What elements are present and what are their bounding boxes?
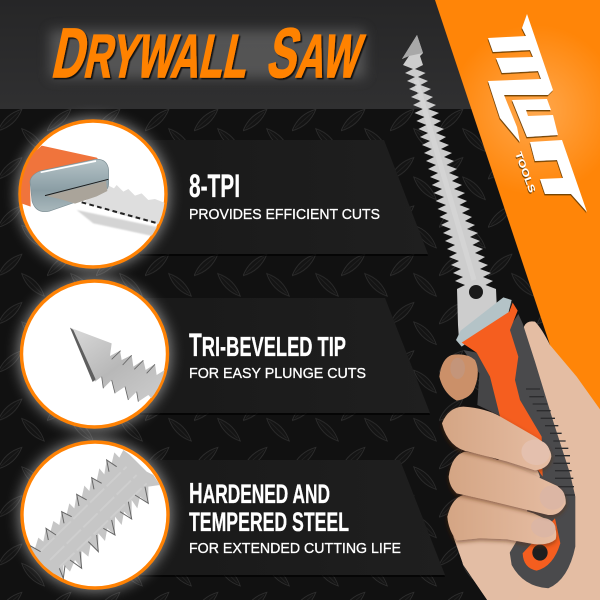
heading: hardened and tempered steel: HARDENED AND bbox=[189, 478, 330, 510]
blade tip shading bbox=[402, 35, 423, 59]
logo mark bbox=[488, 14, 587, 212]
thumb tip bbox=[439, 354, 478, 401]
hand holding saw handle bbox=[439, 297, 600, 600]
panel: 8-TPI bbox=[140, 140, 428, 256]
finger 3 bbox=[447, 495, 557, 544]
heading: 8-TPI: 8-TPI bbox=[189, 168, 240, 204]
serrated blade bbox=[20, 450, 160, 578]
palm over handle base bbox=[455, 536, 523, 600]
circle: hardened steel close-up bbox=[19, 439, 171, 591]
brushed steel streaks bbox=[40, 467, 147, 567]
logo text: tools: TOOLS bbox=[512, 150, 537, 194]
finger 2 nail bbox=[537, 483, 568, 513]
orange corner panel bbox=[435, 0, 600, 600]
ferrule bbox=[456, 297, 512, 347]
title: SAW bbox=[262, 14, 371, 92]
handle orange body bbox=[462, 303, 543, 477]
orange handle bbox=[18, 146, 100, 207]
title glow bbox=[50, 30, 365, 78]
heading: hardened and tempered steel: TEMPERED STEEL bbox=[189, 507, 349, 537]
bevel edge bbox=[70, 328, 96, 382]
circle: handle and blade close-up bbox=[17, 118, 169, 270]
title: DRYWALL bbox=[47, 14, 258, 92]
text: for easy plunge cuts: FOR EASY PLUNGE CUTS bbox=[189, 366, 366, 382]
panel: hardened and tempered steel bbox=[140, 460, 445, 577]
blade shadow bbox=[78, 210, 158, 237]
blade highlight bbox=[416, 80, 474, 280]
finger 2 bbox=[449, 452, 568, 515]
blade hole bbox=[469, 285, 483, 299]
tooth notches bbox=[102, 351, 155, 402]
handle grip bbox=[509, 314, 575, 588]
heading: tri-beveled tip: TRI-BEVELED TIP bbox=[189, 327, 346, 363]
blade tip bbox=[70, 328, 170, 402]
logo: Mutt Tools bbox=[488, 14, 587, 212]
saw blade bbox=[402, 35, 497, 340]
blade bbox=[83, 185, 168, 224]
finger 1 nail bbox=[519, 436, 553, 468]
ferrule base metal bbox=[47, 181, 107, 204]
text: provides efficient cuts: PROVIDES EFFICIENT CUTS bbox=[189, 207, 380, 223]
grip left lobe bbox=[463, 350, 502, 417]
grip ribs bbox=[526, 389, 575, 495]
text: for extended cutting life: FOR EXTENDED CUTTING LIFE bbox=[189, 541, 401, 557]
circle: tri-beveled tip close-up bbox=[18, 278, 170, 430]
finger 3 nail bbox=[529, 516, 557, 540]
heading: hardened and tempered steel bbox=[189, 478, 349, 537]
palm bbox=[453, 321, 600, 600]
handle orange base and hole bbox=[523, 518, 560, 571]
header band bbox=[0, 0, 600, 109]
tooth edges bbox=[30, 460, 148, 578]
ferrule bbox=[30, 159, 109, 212]
thumb nail bbox=[450, 358, 465, 379]
finger 1 bbox=[442, 407, 553, 470]
panel: tri-beveled tip bbox=[140, 298, 430, 415]
